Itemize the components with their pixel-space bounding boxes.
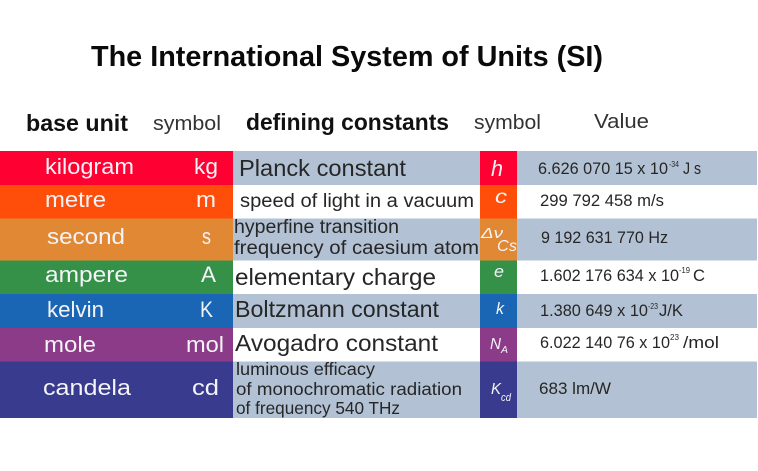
row: Planck constant: Planck constant — [239, 155, 407, 181]
row: metre — [0, 185, 233, 218]
row: speed of light: speed of light in a vacuum — [240, 191, 474, 212]
row: mole: mol — [186, 332, 224, 357]
column headings — [26, 109, 649, 136]
value: elementary charge: -19 — [679, 266, 691, 275]
row: hyperfine transition: frequency of caesium atom — [234, 238, 479, 259]
symbol: K cd: cd — [501, 392, 512, 404]
row: kelvin — [0, 294, 233, 328]
value: elementary charge: C — [693, 266, 705, 285]
value: Planck: 6.626 070 15 x 10 — [538, 159, 668, 178]
row: luminous efficacy: of frequency 540 THz — [236, 398, 400, 418]
row: second — [0, 218, 233, 260]
symbol: delta nu Cs: Δν — [480, 225, 504, 242]
row: mole — [0, 328, 233, 362]
row: Boltzmann constant — [233, 294, 480, 328]
value: Avogadro: /mol — [683, 333, 719, 352]
symbol: e: e — [494, 262, 504, 281]
panel: base units — [0, 151, 233, 418]
value: Boltzmann: 1.380 649 x 10 — [540, 301, 648, 320]
row: elementary charge: elementary charge — [235, 264, 436, 290]
value: Planck: -34 — [669, 160, 679, 169]
value: Planck — [517, 151, 757, 185]
value: elementary charge: 1.602 176 634 x 10 — [540, 266, 679, 285]
symbol: delta nu Cs — [480, 218, 517, 260]
symbol: c — [480, 185, 517, 218]
title: The International System of Units (SI) — [91, 41, 603, 73]
row: luminous efficacy: of monochromatic radiation — [236, 379, 462, 399]
column headings: defining constants — [246, 109, 449, 135]
row: luminous efficacy: luminous efficacy — [236, 359, 375, 379]
symbol: delta nu Cs: Cs — [497, 238, 517, 255]
row: kilogram: kg — [194, 154, 218, 179]
value: Boltzmann: J/K — [659, 301, 684, 320]
row: Avogadro constant: Avogadro constant — [235, 330, 439, 356]
value: speed of light: 299 792 458 m/s — [540, 191, 664, 210]
row: second: s — [202, 224, 211, 249]
row: luminous efficacy — [233, 359, 480, 418]
value: luminous efficacy — [517, 362, 757, 418]
row: candela: cd — [192, 375, 219, 400]
symbol: K cd — [480, 362, 517, 418]
panel: defining constants — [233, 151, 480, 418]
value: Boltzmann — [517, 294, 757, 328]
row: candela — [0, 362, 233, 418]
column headings: Value — [594, 111, 649, 133]
symbol: h — [480, 151, 517, 185]
column headings: base unit — [26, 110, 128, 136]
symbol: k: k — [496, 299, 505, 318]
value: Boltzmann: -23 — [648, 302, 658, 311]
value: Avogadro: 6.022 140 76 x 10 — [540, 333, 670, 352]
row: second: second — [47, 224, 125, 249]
row: Boltzmann constant: Boltzmann constant — [235, 296, 440, 322]
row: candela: candela — [43, 375, 132, 400]
row: Planck constant — [233, 151, 480, 185]
symbol: N A — [480, 328, 517, 362]
row: kilogram: kilogram — [45, 154, 134, 179]
row: ampere: ampere — [45, 262, 128, 287]
value: Planck: J s — [683, 159, 701, 178]
symbol: k — [480, 294, 517, 328]
value: Avogadro: 23 — [670, 333, 680, 342]
row: kelvin: kelvin — [47, 297, 104, 322]
row: ampere — [0, 260, 233, 294]
panel: values — [517, 151, 757, 418]
row: hyperfine transition — [233, 217, 480, 260]
column headings: symbol — [474, 112, 541, 134]
column headings: symbol — [153, 113, 221, 135]
value: luminous efficacy: 683 lm/W — [539, 379, 611, 398]
symbol: e — [480, 260, 517, 294]
symbol: N A: A — [500, 345, 508, 356]
symbol: h: h — [491, 156, 503, 181]
row: metre: metre — [45, 187, 106, 212]
row: hyperfine transition: hyperfine transition — [234, 217, 399, 238]
row: mole: mole — [44, 332, 96, 357]
row: ampere: A — [201, 262, 216, 287]
symbol: N A: N — [490, 336, 501, 353]
symbol: c: c — [495, 187, 508, 208]
symbol: K cd: K — [491, 381, 502, 398]
row: kilogram — [0, 151, 233, 185]
row: kelvin: K — [200, 297, 213, 322]
row: metre: m — [196, 187, 216, 212]
panel: constant symbols — [480, 151, 517, 418]
value: caesium frequency — [517, 218, 757, 260]
value: caesium frequency: 9 192 631 770 Hz — [541, 228, 668, 247]
